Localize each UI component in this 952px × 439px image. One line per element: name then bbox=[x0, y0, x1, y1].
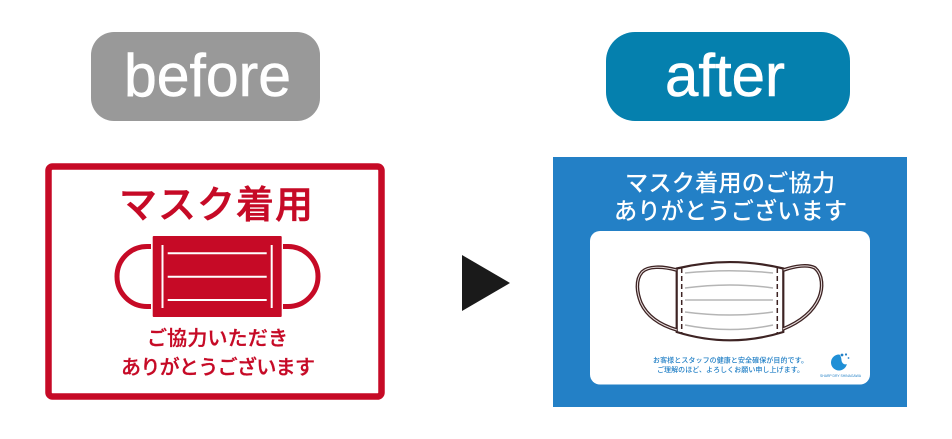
icon: red mask bbox=[117, 236, 318, 317]
badge: after bbox=[606, 32, 850, 121]
sign heading: ありがとうございます bbox=[614, 198, 847, 224]
small message bbox=[653, 356, 808, 374]
sign message: ありがとうございます bbox=[121, 355, 315, 379]
icon: company logo bbox=[820, 352, 861, 378]
panel: after sign bbox=[553, 157, 907, 407]
panel: before sign bbox=[48, 166, 382, 396]
badge: before bbox=[91, 32, 320, 121]
small message: ご理解のほど、よろしくお願い申し上げます。 bbox=[657, 365, 804, 374]
badge: after: after bbox=[665, 42, 785, 109]
small message: お客様とスタッフの健康と安全確保が目的です。 bbox=[653, 356, 808, 364]
red sign frame bbox=[48, 166, 382, 396]
white card bbox=[590, 231, 870, 384]
icon: company logo: SHARP DRY SHINAGAWA bbox=[820, 374, 861, 378]
sign message: ご協力いただき bbox=[147, 327, 288, 350]
sign heading bbox=[614, 170, 847, 224]
badge: before: before bbox=[124, 42, 291, 109]
sign message bbox=[121, 327, 315, 379]
sign heading: マスク着用のご協力 bbox=[625, 170, 835, 196]
sign heading: マスク着用 bbox=[119, 185, 313, 227]
icon: white mask outline bbox=[637, 262, 822, 340]
arrow bbox=[462, 255, 510, 311]
blue background bbox=[553, 157, 907, 407]
